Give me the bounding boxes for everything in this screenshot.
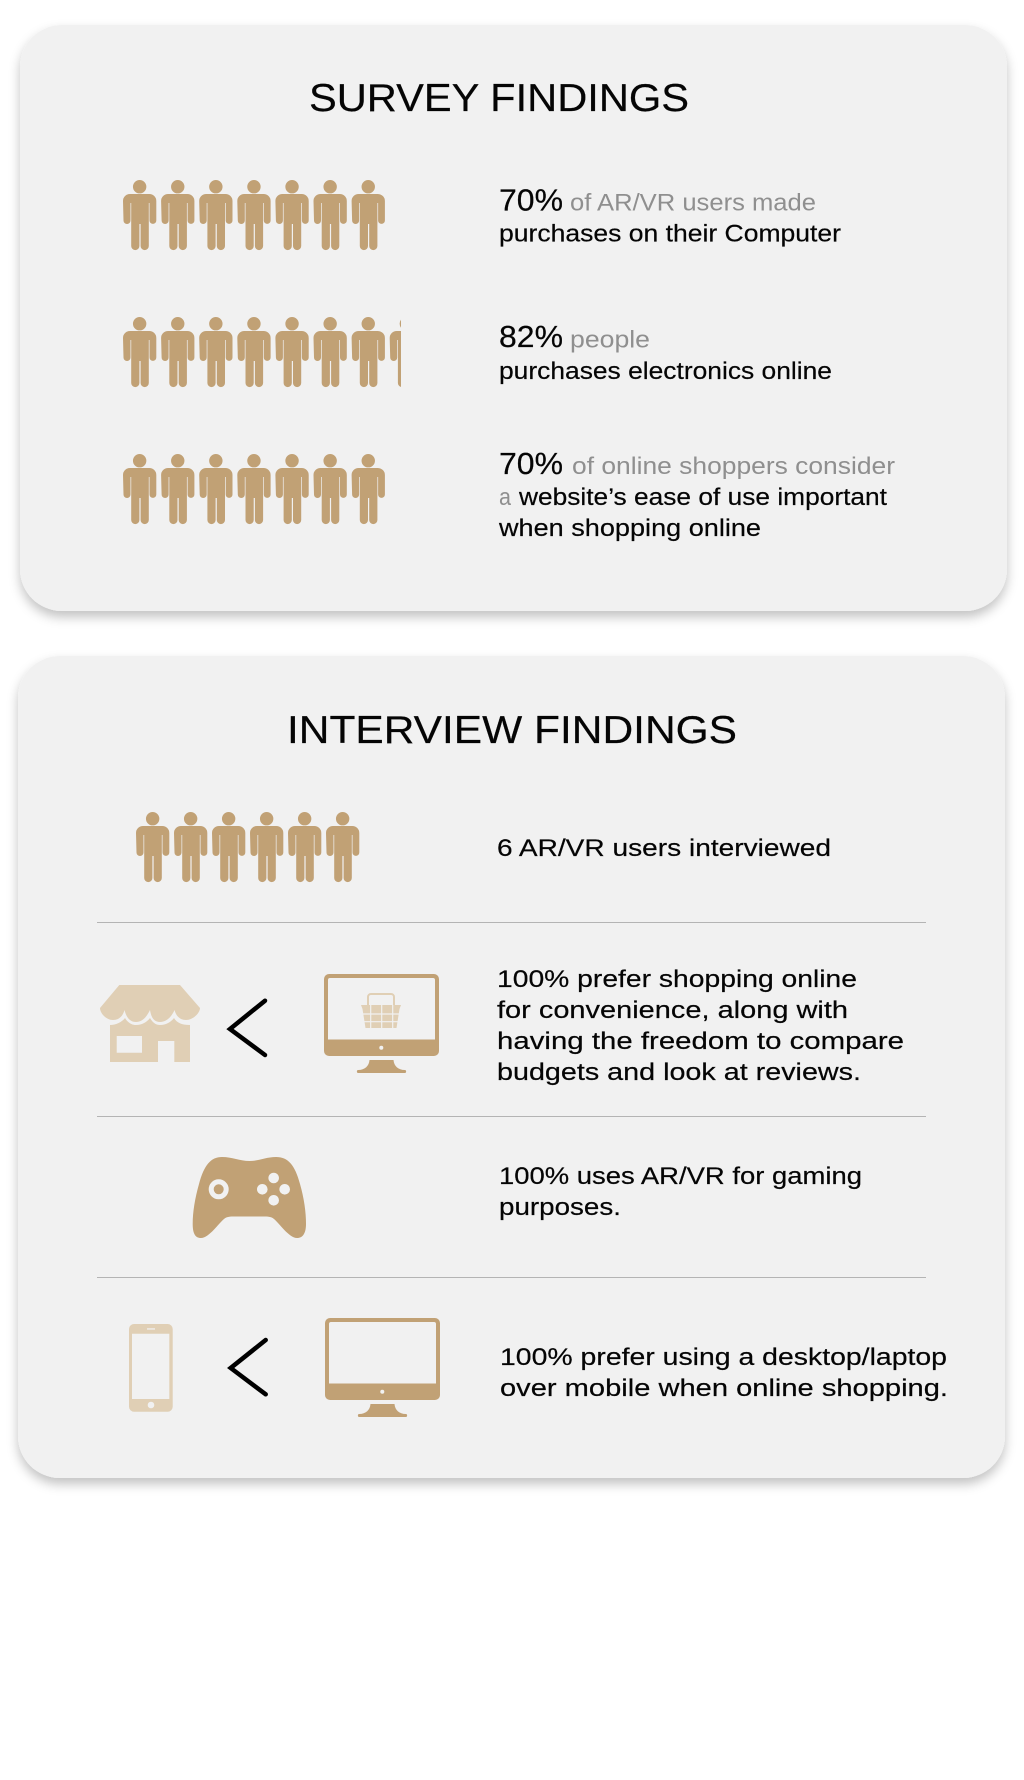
panel: interview findings <box>18 656 1005 1478</box>
text: gaming: 100% uses AR/VR for gaming <box>499 1163 862 1190</box>
panel: survey findings <box>20 25 1007 611</box>
icon: monitor <box>325 1318 440 1417</box>
text: prefer shopping online: budgets and look at reviews. <box>497 1059 861 1086</box>
text: users interviewed: 6 AR/VR users interviewed <box>497 835 831 862</box>
arrow: less than <box>230 1001 265 1055</box>
heading: survey findings: SURVEY FINDINGS <box>309 77 689 120</box>
arrow: less than <box>231 1340 266 1394</box>
heading: interview findings: INTERVIEW FINDINGS <box>287 709 737 752</box>
text: 70% computer purchases: 70% <box>499 184 563 218</box>
icon: game controller <box>193 1157 306 1238</box>
text: prefer desktop: over mobile when online shopping. <box>500 1375 948 1402</box>
text: 70% ease of use: of online shoppers consider <box>572 453 895 480</box>
icon row: 70% people, ease of use <box>123 454 385 524</box>
icon row: 70% people <box>123 180 385 250</box>
text: 82% electronics: purchases electronics online <box>499 358 832 385</box>
text: prefer shopping online: 100% prefer shopping online <box>497 966 857 993</box>
text: 70% computer purchases: of AR/VR users made <box>570 190 816 216</box>
text: prefer shopping online: for convenience, along with <box>497 997 848 1024</box>
text: 82% electronics: people <box>570 326 650 354</box>
text: 70% ease of use <box>498 447 895 542</box>
text: 70% computer purchases: purchases on their Computer <box>499 220 841 248</box>
text: 70% computer purchases <box>499 184 841 248</box>
icon: smartphone <box>129 1324 173 1412</box>
icon row: 82% people <box>123 317 423 387</box>
icon: store <box>100 985 200 1062</box>
icon: monitor with basket <box>324 974 439 1073</box>
text: 70% ease of use: a <box>499 484 511 511</box>
text: 70% ease of use: 70% <box>499 447 563 481</box>
icon row: 6 people <box>136 812 359 882</box>
text: 70% ease of use: when shopping online <box>498 515 761 542</box>
text: prefer shopping online: having the freedom to compare <box>497 1028 904 1055</box>
text: prefer desktop <box>500 1344 948 1402</box>
text: prefer desktop: 100% prefer using a desktop/laptop <box>500 1344 947 1371</box>
text: prefer shopping online <box>497 966 904 1086</box>
icon: shopping basket <box>361 994 401 1028</box>
text: 82% electronics: 82% <box>499 320 563 354</box>
text: gaming: purposes. <box>499 1194 621 1221</box>
text: gaming <box>499 1163 862 1221</box>
text: 82% electronics <box>499 320 832 385</box>
text: 70% ease of use: website’s ease of use important <box>518 484 887 511</box>
